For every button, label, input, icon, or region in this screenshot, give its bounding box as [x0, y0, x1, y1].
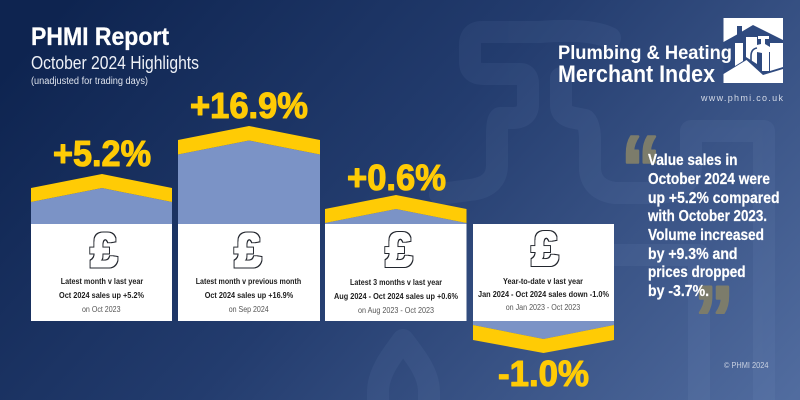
bar body: [178, 140, 320, 224]
yellow chevron: [31, 174, 172, 202]
panel: year-to-date v last year: [473, 222, 614, 394]
card: [31, 224, 172, 321]
comparison: on Sep 2024: [229, 305, 269, 314]
subtitle: October 2024 Highlights: [31, 53, 199, 73]
detail: Jan 2024 - Oct 2024 sales down -1.0%: [478, 290, 609, 299]
label: Year-to-date v last year: [503, 277, 583, 286]
title block: [31, 23, 199, 87]
panel: latest month v previous month: [178, 85, 320, 321]
label: Latest month v last year: [61, 277, 143, 286]
quote text: by +9.3% and: [648, 246, 738, 263]
copyright: © PHMI 2024: [724, 361, 769, 370]
quote text: Volume increased: [648, 227, 764, 244]
watermark: pipes and flame: [378, 31, 764, 400]
quote text: October 2024 were: [648, 171, 770, 188]
comparison: on Oct 2023: [82, 305, 121, 314]
icon: pound: £: [386, 223, 412, 276]
card: [473, 224, 614, 321]
bar body: [325, 209, 466, 225]
value: +5.2%: [53, 133, 151, 174]
note: (unadjusted for trading days): [31, 76, 148, 87]
comparison: on Aug 2023 - Oct 2023: [358, 306, 434, 315]
label: Latest 3 months v last year: [350, 278, 442, 287]
quote text: with October 2023.: [647, 208, 767, 225]
logo text line 1: Plumbing & Heating: [558, 43, 732, 64]
icon: pound: £: [91, 224, 117, 276]
icon: pound: £: [532, 222, 558, 275]
card: [178, 224, 320, 321]
value: +16.9%: [190, 85, 308, 126]
card: [325, 224, 466, 321]
detail: Aug 2024 - Oct 2024 sales up +0.6%: [334, 292, 458, 301]
detail: Oct 2024 sales up +5.2%: [59, 291, 144, 300]
bar body: [31, 188, 172, 224]
bar body: [473, 321, 614, 339]
closing quote mark: ”: [694, 268, 734, 370]
quote text: by -3.7%.: [648, 283, 709, 300]
quote text: prices dropped: [648, 264, 746, 281]
value: +0.6%: [347, 157, 446, 198]
title: PHMI Report: [31, 23, 170, 51]
website: www.phmi.co.uk: [700, 93, 784, 103]
logo: [558, 18, 784, 103]
logo mark: [724, 18, 783, 83]
yellow chevron: [473, 325, 614, 353]
label: Latest month v previous month: [196, 277, 301, 286]
yellow chevron: [325, 195, 466, 223]
opening quote mark: “: [621, 118, 661, 220]
icon: pound: £: [235, 224, 261, 276]
quote text: [647, 152, 780, 300]
quote text: up +5.2% compared: [648, 190, 780, 207]
detail: Oct 2024 sales up +16.9%: [205, 291, 293, 300]
comparison: on Jan 2023 - Oct 2023: [506, 303, 581, 312]
logo text line 2: Merchant Index: [558, 61, 716, 88]
panel: latest 3 months v last year: [325, 157, 466, 321]
yellow chevron: [178, 126, 320, 154]
panel: latest month v last year: [31, 133, 172, 321]
value: -1.0%: [498, 353, 589, 394]
quote text: Value sales in: [648, 152, 738, 169]
